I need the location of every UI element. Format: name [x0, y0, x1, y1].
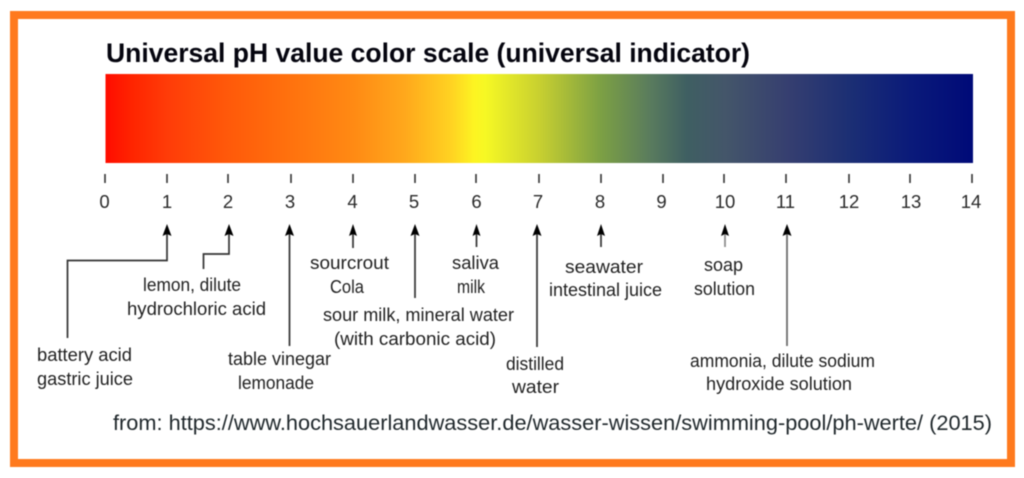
- pH axis: ticks and numbers: 10: [715, 191, 735, 212]
- label: distilled water: water: [511, 377, 559, 397]
- arrow: pH 4 sourcrout: [349, 224, 357, 248]
- arrow: pH 8 seawater: [597, 224, 605, 247]
- arrow: pH 11 ammonia: [782, 224, 792, 346]
- label: saliva: saliva: [452, 253, 500, 273]
- pH axis: ticks and numbers: 7: [533, 191, 543, 212]
- label: distilled water: [506, 354, 564, 397]
- label: lemon: [127, 275, 266, 319]
- label: seawater: seawater: [565, 257, 643, 277]
- pH axis: ticks and numbers: 8: [595, 191, 605, 212]
- pH axis: ticks and numbers: 11: [776, 191, 795, 212]
- label: sour milk: [323, 305, 514, 349]
- arrow: pH 10 soap: [721, 224, 729, 247]
- pH axis: ticks and numbers: 4: [347, 191, 358, 212]
- pH axis: ticks and numbers: [99, 174, 981, 212]
- pH axis: ticks and numbers: 1: [162, 191, 172, 212]
- label: battery acid: battery acid: [37, 345, 132, 365]
- label: vinegar: table vinegar: [228, 349, 331, 369]
- arrow: pH 7 distilled water: [532, 224, 542, 347]
- label: sour milk: (with carbonic acid): [334, 329, 496, 349]
- label: sourcrout: sourcrout: [310, 253, 389, 273]
- label: saliva: [452, 253, 500, 297]
- label: sourcrout: [310, 253, 389, 297]
- pH axis: ticks and numbers: 14: [961, 191, 981, 212]
- label: vinegar: lemonade: [238, 373, 314, 393]
- arrow: pH 6 saliva: [472, 224, 480, 247]
- label: lemon: hydrochloric acid: [127, 299, 266, 319]
- title: Universal pH value color scale (universal indicator): [106, 38, 750, 68]
- arrow: pH 3 vinegar: [285, 224, 294, 346]
- arrow: pH 5 sour milk: [410, 224, 420, 298]
- label: sour milk: sour milk, mineral water: [323, 305, 514, 325]
- label: battery acid: [37, 345, 133, 389]
- pH axis: ticks and numbers: 12: [839, 191, 859, 212]
- label: seawater: intestinal juice: [549, 280, 662, 300]
- label: soap solution: [694, 255, 755, 299]
- label: soap solution: soap: [704, 255, 743, 275]
- label: vinegar: [228, 349, 331, 393]
- label: soap solution: solution: [694, 279, 755, 299]
- pH color gradient bar: [106, 74, 973, 163]
- label: battery acid: gastric juice: [37, 369, 133, 389]
- arrow: pH 2 lemon: [204, 224, 234, 269]
- label: ammonia: ammonia, dilute sodium: [690, 351, 875, 371]
- source citation: from: https://www.hochsauerlandwasser.de/wasser-wissen/swimming-pool/ph-werte/ (2015): [113, 411, 992, 435]
- label: lemon: lemon, dilute: [143, 275, 241, 295]
- pH axis: ticks and numbers: 6: [471, 191, 482, 212]
- arrow: pH 1 battery acid: [68, 224, 172, 338]
- label: ammonia: hydroxide solution: [706, 374, 852, 394]
- pH axis: ticks and numbers: 13: [901, 191, 921, 212]
- pH axis: ticks and numbers: 0: [99, 191, 110, 212]
- label: saliva: milk: [457, 277, 486, 297]
- label: sourcrout: Cola: [330, 277, 365, 297]
- pH axis: ticks and numbers: 3: [285, 191, 295, 212]
- pH axis: ticks and numbers: 5: [409, 191, 419, 212]
- pH axis: ticks and numbers: 2: [223, 191, 233, 212]
- label: ammonia: [690, 351, 875, 394]
- label: distilled water: distilled: [506, 354, 564, 374]
- pH axis: ticks and numbers: 9: [656, 191, 667, 212]
- label: seawater: [549, 257, 662, 300]
